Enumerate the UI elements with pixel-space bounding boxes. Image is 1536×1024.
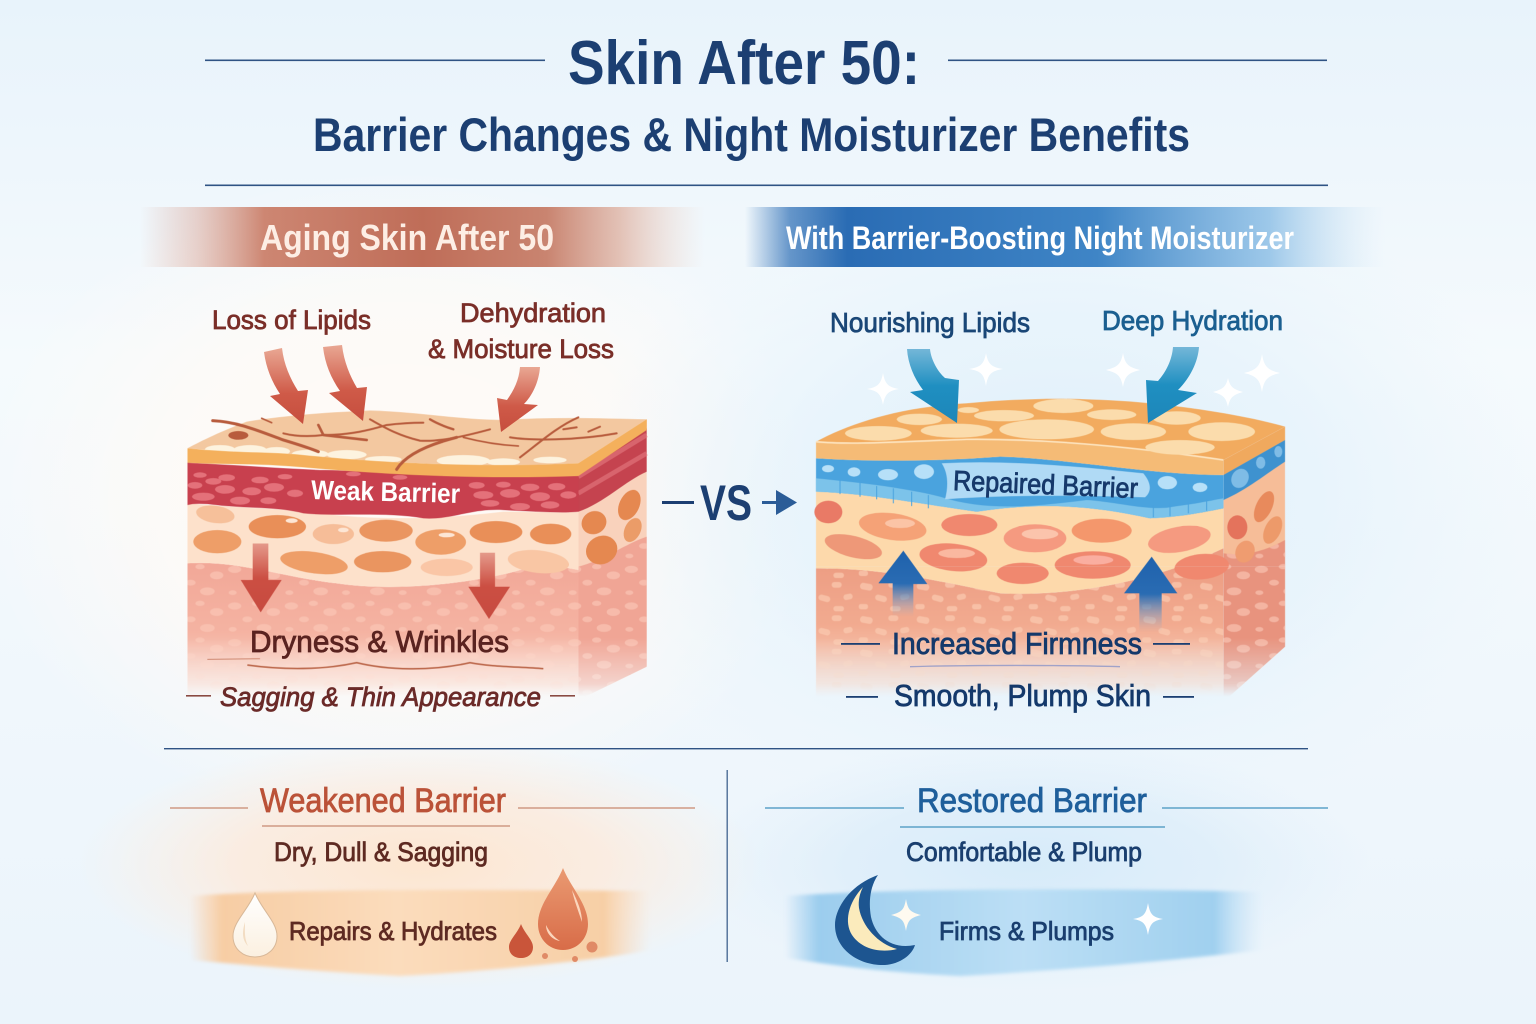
- arrow: firmness up right: [1124, 557, 1177, 632]
- arrow: lipids loss 2: [323, 345, 367, 421]
- arrow: down right: [468, 553, 510, 619]
- arrow: lipids loss 1: [264, 348, 308, 424]
- top face: [816, 399, 1285, 475]
- underline stroke: [910, 665, 1120, 667]
- heading: weakened barrier: Weakened Barrier: [260, 782, 506, 820]
- arrow: hydration in: [1146, 347, 1199, 423]
- arrow: firmness up left: [878, 551, 927, 617]
- wavy wrinkle lines: [207, 659, 543, 669]
- icon: sparkle left: [891, 899, 921, 931]
- title: [205, 29, 1328, 186]
- arrow: lipids in: [907, 349, 959, 423]
- text: firms and plumps: Firms & Plumps: [939, 916, 1114, 946]
- icon: crescent moon: [835, 875, 915, 965]
- heading: restored barrier: [765, 782, 1328, 827]
- label: deep hydration: Deep Hydration: [1102, 305, 1283, 336]
- arrow: moisture loss: [497, 367, 540, 432]
- title: Barrier Changes & Night Moisturizer Benefits: [313, 108, 1190, 161]
- VS marker: VS: [700, 475, 752, 531]
- dermis layer: [187, 563, 578, 700]
- label: dehydration and moisture loss: [428, 298, 614, 364]
- title: Skin After 50:: [568, 29, 920, 98]
- text: weak barrier: Weak Barrier: [311, 475, 461, 509]
- text: smooth plump skin: Smooth, Plump Skin: [894, 678, 1151, 713]
- text: repairs and hydrates: Repairs & Hydrates: [289, 916, 497, 946]
- panel: repaired skin block: [814, 399, 1286, 702]
- label: dehydration and moisture loss: Dehydration: [460, 298, 606, 328]
- brush band: [785, 889, 1262, 976]
- top face with cracks: [187, 411, 647, 477]
- panel: aging skin block: [187, 411, 647, 700]
- side face: [1223, 427, 1286, 702]
- weak barrier band: [187, 463, 578, 518]
- sparkles: [867, 353, 1280, 407]
- header: aging skin: Aging Skin After 50: [260, 217, 554, 258]
- text: dryness and wrinkles: Dryness & Wrinkles: [250, 624, 509, 659]
- text: repaired barrier: Repaired Barrier: [952, 465, 1139, 504]
- text: dry dull sagging: Dry, Dull & Sagging: [274, 837, 488, 867]
- text: comfortable and plump: Comfortable & Plump: [906, 837, 1142, 867]
- brush band: [190, 890, 650, 976]
- heading: weakened barrier: [170, 782, 695, 826]
- side face: [578, 419, 647, 700]
- heading: restored barrier: Restored Barrier: [917, 782, 1147, 820]
- arrow: down left: [241, 543, 282, 612]
- text: increased firmness: Increased Firmness: [892, 626, 1142, 661]
- VS marker: [662, 475, 797, 531]
- fat layer: [814, 492, 1230, 594]
- icon: orange droplets: [509, 868, 598, 962]
- panel: weakened barrier: [170, 782, 695, 976]
- dermis layer: [816, 548, 1223, 702]
- blue barrier band: [816, 457, 1223, 518]
- header: with moisturizer: With Barrier-Boosting Night Moisturizer: [786, 220, 1294, 256]
- section divider: [164, 748, 1308, 962]
- icon: white droplet: [233, 893, 277, 957]
- header: aging skin: [140, 207, 705, 267]
- text: sagging and thin: Sagging & Thin Appearance: [220, 682, 541, 712]
- icon: sparkle right: [1133, 903, 1163, 935]
- label: nourishing lipids: Nourishing Lipids: [830, 307, 1030, 338]
- header: with moisturizer: [745, 207, 1385, 267]
- label: loss of lipids: Loss of Lipids: [212, 305, 371, 335]
- fat layer: [187, 503, 578, 587]
- panel: restored barrier: [765, 782, 1328, 976]
- label: dehydration and moisture loss: & Moisture Loss: [428, 334, 614, 364]
